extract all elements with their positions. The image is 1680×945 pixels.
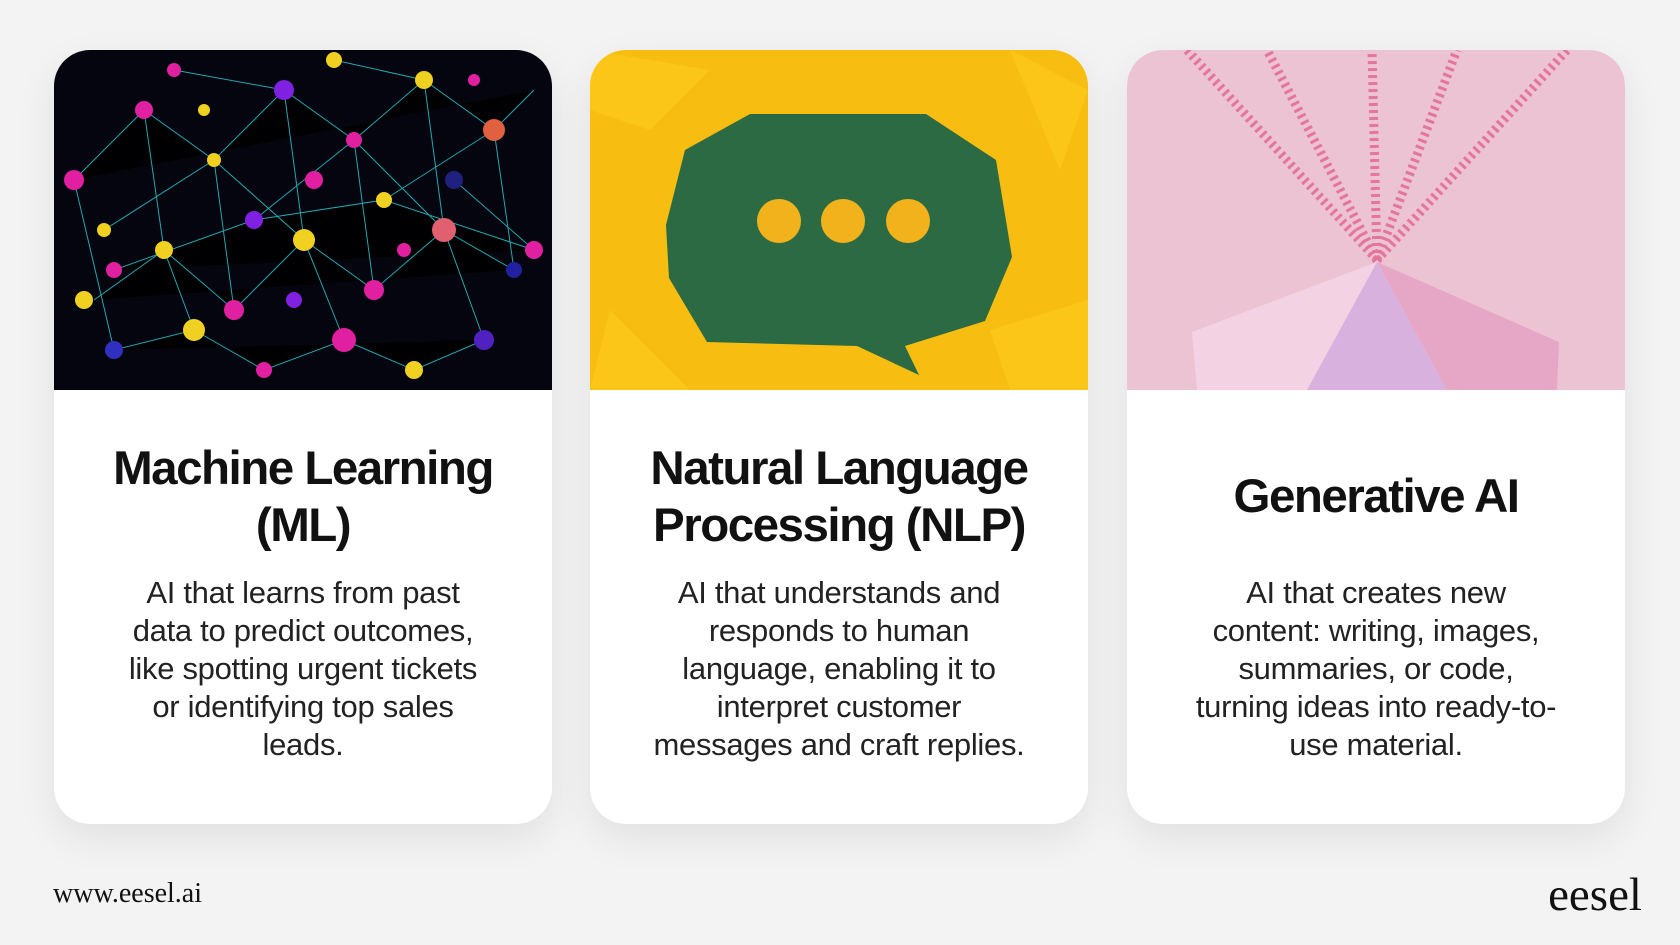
description: AI that learns from past: [146, 575, 460, 610]
image: neural network: [54, 50, 552, 390]
card: NLP: [590, 50, 1088, 824]
description: like spotting urgent tickets: [129, 651, 477, 686]
image: speech bubble: [590, 50, 1088, 390]
card: generative AI: [1127, 50, 1625, 824]
footer url: www.eesel.ai: [53, 878, 202, 909]
description: content: writing, images,: [1213, 613, 1539, 648]
logo: eesel: [1548, 869, 1642, 921]
title: Processing (NLP): [653, 499, 1025, 552]
description: use material.: [1289, 727, 1463, 762]
description: [129, 575, 477, 762]
description: interpret customer: [717, 689, 961, 724]
title: [113, 442, 493, 552]
title: Generative AI: [1234, 470, 1518, 523]
description: AI that creates new: [1246, 575, 1506, 610]
title: Natural Language: [650, 442, 1028, 495]
description: or identifying top sales: [152, 689, 454, 724]
description: messages and craft replies.: [654, 727, 1024, 762]
title: (ML): [256, 499, 350, 552]
description: leads.: [263, 727, 343, 762]
description: data to predict outcomes,: [133, 613, 473, 648]
description: turning ideas into ready-to-: [1196, 689, 1556, 724]
description: summaries, or code,: [1238, 651, 1514, 686]
description: [654, 575, 1024, 762]
description: responds to human: [709, 613, 969, 648]
description: language, enabling it to: [682, 651, 996, 686]
title: Machine Learning: [113, 442, 493, 495]
title: [650, 442, 1028, 552]
description: AI that understands and: [678, 575, 1000, 610]
description: [1196, 575, 1556, 762]
image: prism: [1127, 50, 1625, 390]
card: machine learning: [54, 50, 552, 824]
